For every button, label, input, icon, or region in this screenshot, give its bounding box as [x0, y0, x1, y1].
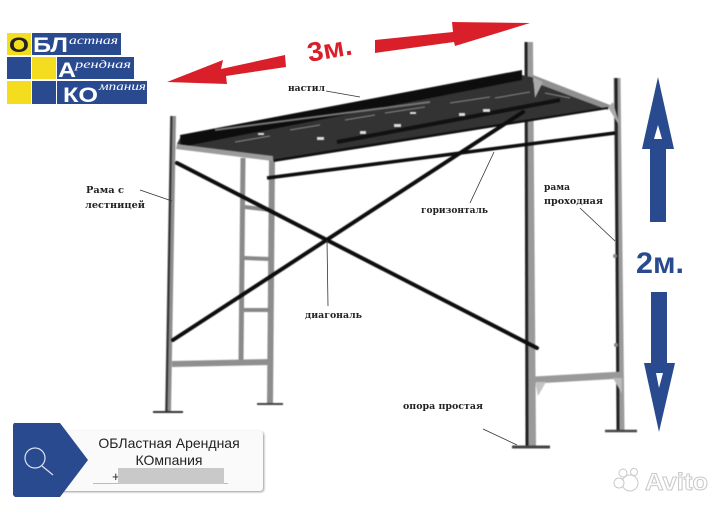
logo: мпания	[98, 79, 147, 93]
right passage frame	[512, 42, 637, 447]
red arrow left	[167, 55, 286, 84]
diagonal braces	[173, 112, 537, 348]
avito watermark: Avito	[645, 469, 708, 496]
logo: О	[9, 34, 29, 57]
label: simple support	[403, 401, 517, 445]
logo: астная	[69, 33, 119, 47]
logo: КО	[63, 84, 98, 107]
card name text: КОмпания	[135, 452, 202, 468]
horizontal brace	[267, 133, 615, 178]
label: horizontal	[421, 152, 494, 216]
label: frame with ladder: Рама с	[86, 185, 124, 196]
scaffold diagram	[153, 42, 637, 447]
deck	[176, 70, 620, 162]
3m label: 3м.	[305, 31, 354, 68]
search badge	[13, 423, 88, 497]
card body	[53, 431, 263, 491]
label: passage frame: проходная	[544, 196, 603, 207]
2m label: 2м.	[636, 247, 684, 280]
logo	[7, 33, 147, 107]
blue arrow up	[642, 77, 674, 222]
label: frame with ladder	[85, 185, 172, 211]
blue arrow down	[644, 292, 675, 432]
logo: БЛ	[33, 34, 68, 57]
phone line	[93, 468, 228, 484]
label: nastil: настил	[288, 83, 325, 94]
card name text	[98, 435, 240, 468]
redacted phone	[118, 468, 224, 484]
red arrow right	[375, 22, 530, 53]
search card	[13, 423, 266, 497]
label: diagonal	[305, 240, 363, 321]
logo: рендная	[74, 57, 132, 71]
label: passage frame	[544, 182, 615, 241]
logo: А	[58, 59, 76, 82]
label: horizontal: горизонталь	[421, 205, 489, 216]
label: simple support: опора простая	[403, 401, 483, 412]
label: frame with ladder: лестницей	[85, 200, 145, 211]
label: nastil	[288, 83, 360, 97]
label: diagonal: диагональ	[305, 310, 363, 321]
label: passage frame: рама	[544, 182, 570, 193]
left frame with ladder	[153, 116, 283, 412]
phone line: +	[112, 469, 120, 484]
card name text: ОБЛастная Арендная	[98, 435, 240, 451]
